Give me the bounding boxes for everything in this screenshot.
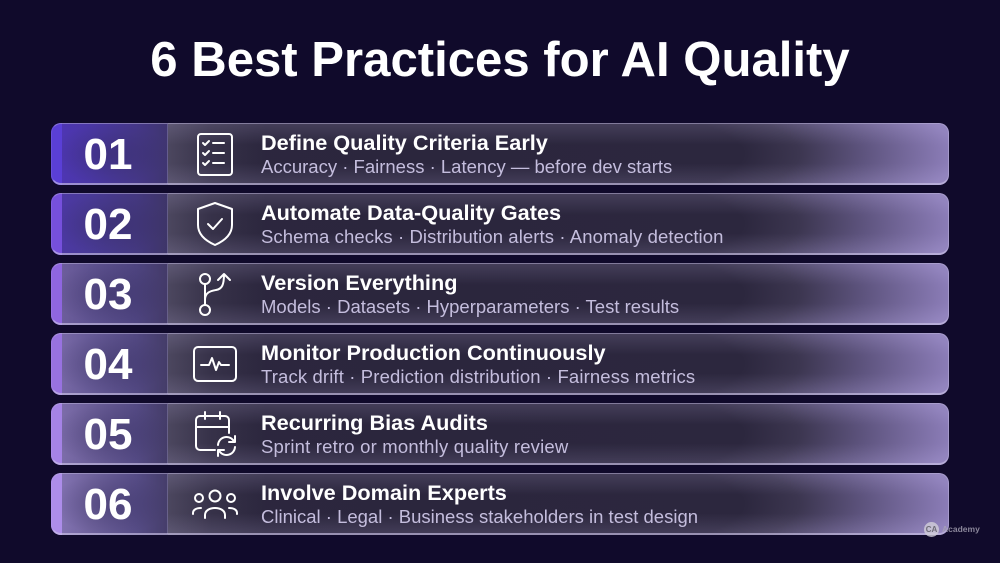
logo: academy watermark: Academy: [942, 524, 980, 534]
number block 04: [51, 333, 168, 395]
panel: practice 04: [51, 333, 949, 395]
heading 06: Involve Domain Experts: [261, 480, 507, 505]
panel: practice 06: [51, 473, 949, 535]
icon: monitor pulse: [193, 346, 237, 382]
heading 04: Monitor Production Continuously: [261, 340, 606, 365]
icon: checklist: [197, 133, 233, 176]
number block 01: [51, 123, 168, 185]
number block 02: [51, 193, 168, 255]
logo: academy watermark: [924, 522, 980, 537]
title: 6 Best Practices for AI Quality: [150, 33, 850, 87]
description 01: Accuracy · Fairness · Latency — before dev starts: [261, 156, 672, 177]
number block 02: 02: [84, 200, 132, 249]
number block 04: 04: [84, 340, 132, 389]
number block 03: [51, 263, 168, 325]
panel: practice 05: [51, 403, 949, 465]
heading 02: Automate Data-Quality Gates: [261, 200, 561, 225]
heading 03: Version Everything: [261, 270, 457, 295]
icon: shield: [197, 202, 233, 246]
heading 05: Recurring Bias Audits: [261, 410, 488, 435]
panel: practice 03: [51, 263, 949, 325]
description 05: Sprint retro or monthly quality review: [261, 436, 568, 457]
number block 05: 05: [84, 410, 132, 459]
logo: academy watermark: CA: [926, 525, 937, 534]
description 04: Track drift · Prediction distribution · Fairness metrics: [261, 366, 695, 387]
number block 05: [51, 403, 168, 465]
description 03: Models · Datasets · Hyperparameters · Test results: [261, 296, 679, 317]
number block 03: 03: [84, 270, 132, 319]
icon: calendar refresh: [195, 411, 236, 457]
panel: practice 01: [51, 123, 949, 185]
number block 06: [51, 473, 168, 535]
number block 06: 06: [84, 480, 132, 529]
icon: team: [192, 490, 238, 519]
description 02: Schema checks · Distribution alerts · Anomaly detection: [261, 226, 724, 247]
icon: branch: [199, 273, 231, 316]
description 06: Clinical · Legal · Business stakeholders in test design: [261, 506, 698, 527]
panel: practice 02: [51, 193, 949, 255]
number block 01: 01: [84, 130, 132, 179]
heading 01: Define Quality Criteria Early: [261, 130, 548, 155]
